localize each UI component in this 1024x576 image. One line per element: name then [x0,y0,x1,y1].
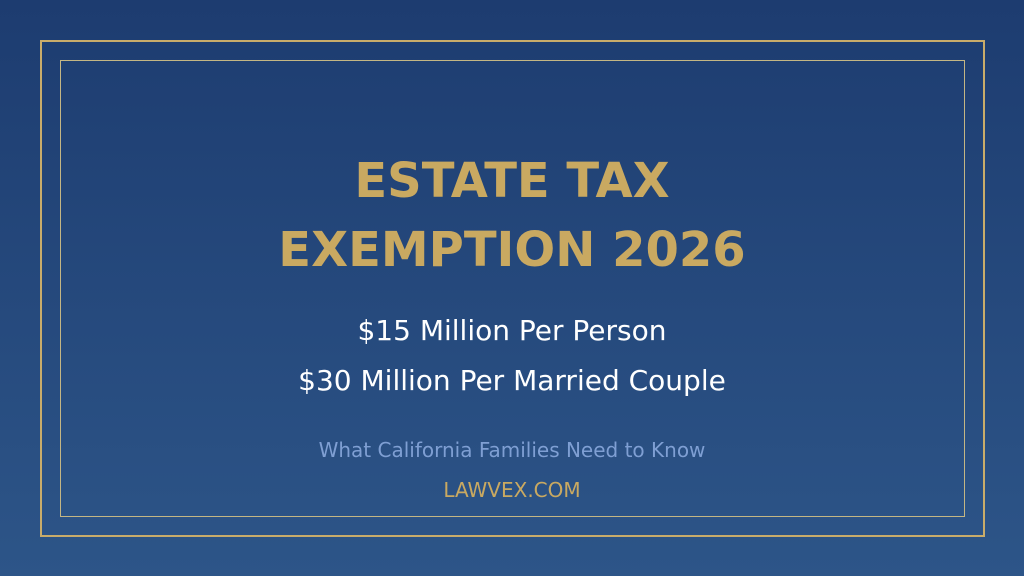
inner gold border [60,60,964,516]
exemption amounts: $30 Million Per Married Couple [298,364,726,397]
exemption amounts: $15 Million Per Person [357,314,667,347]
website: LAWVEX.COM [443,478,581,502]
title [278,153,746,278]
exemption amounts [298,314,726,397]
outer gold border [41,41,984,536]
tagline: What California Families Need to Know [319,438,705,462]
title: EXEMPTION 2026 [278,222,746,278]
title: ESTATE TAX [354,153,670,209]
